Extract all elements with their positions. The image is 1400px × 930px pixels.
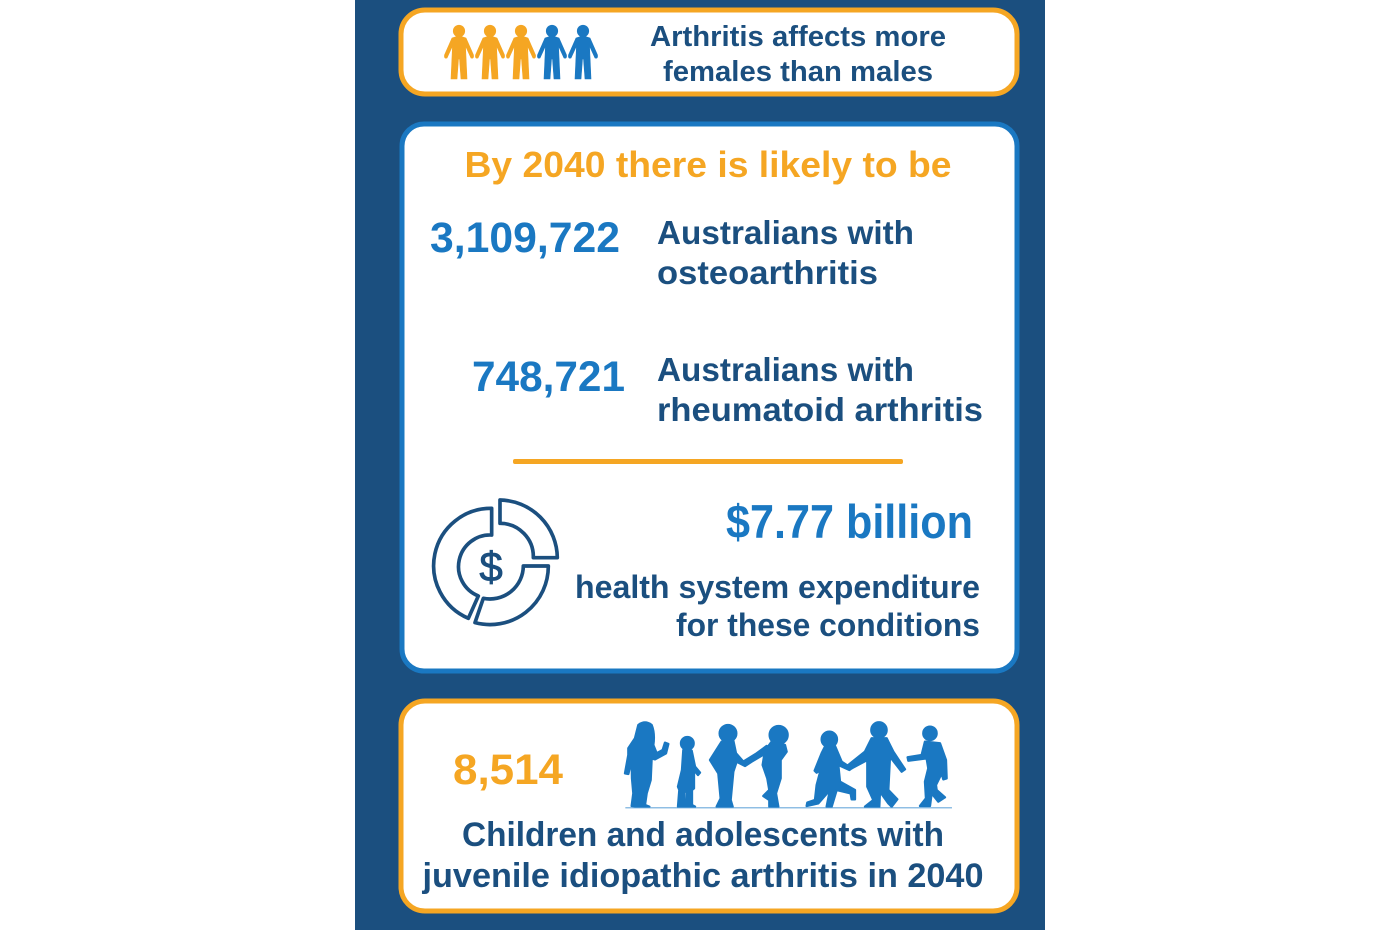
- panel: children with JIA: [401, 701, 1017, 911]
- stat: expenditure: for these conditions: [676, 607, 980, 643]
- text: females than males: females than males: [663, 56, 933, 88]
- stat: osteoarthritis: osteoarthritis: [657, 254, 878, 291]
- stat: 8,514: 8,514: [453, 746, 563, 794]
- icon: children silhouettes: [625, 722, 952, 808]
- stat: osteoarthritis: Australians with: [657, 214, 914, 251]
- background panel: [355, 0, 1045, 930]
- stat: osteoarthritis: [430, 214, 914, 291]
- heading: By 2040 there is likely to be: [464, 144, 952, 185]
- panel: by 2040 projections: [402, 124, 1017, 671]
- text: females than males: [650, 21, 946, 88]
- text: females than males: Arthritis affects more: [650, 21, 946, 53]
- stat: expenditure: health system expenditure: [575, 569, 980, 605]
- icon: dollar donut chart: [434, 500, 557, 625]
- text: children and adolescents: Children and adolescents with: [462, 816, 944, 854]
- stat: rheumatoid arthritis: [472, 351, 983, 428]
- panel: females vs males: [401, 10, 1017, 94]
- icon: dollar donut chart: $: [479, 543, 503, 590]
- stat: expenditure: $7.77 billion: [726, 495, 973, 548]
- stat: rheumatoid arthritis: 748,721: [472, 353, 625, 401]
- stat: rheumatoid arthritis: Australians with: [657, 351, 914, 388]
- stat: expenditure: [575, 495, 980, 643]
- text: children and adolescents: juvenile idiopathic arthritis in 2040: [421, 857, 984, 895]
- text: children and adolescents: [421, 816, 984, 895]
- stat: osteoarthritis: 3,109,722: [430, 214, 620, 262]
- stat: rheumatoid arthritis: rheumatoid arthritis: [657, 391, 983, 428]
- icon: five people: [444, 25, 598, 79]
